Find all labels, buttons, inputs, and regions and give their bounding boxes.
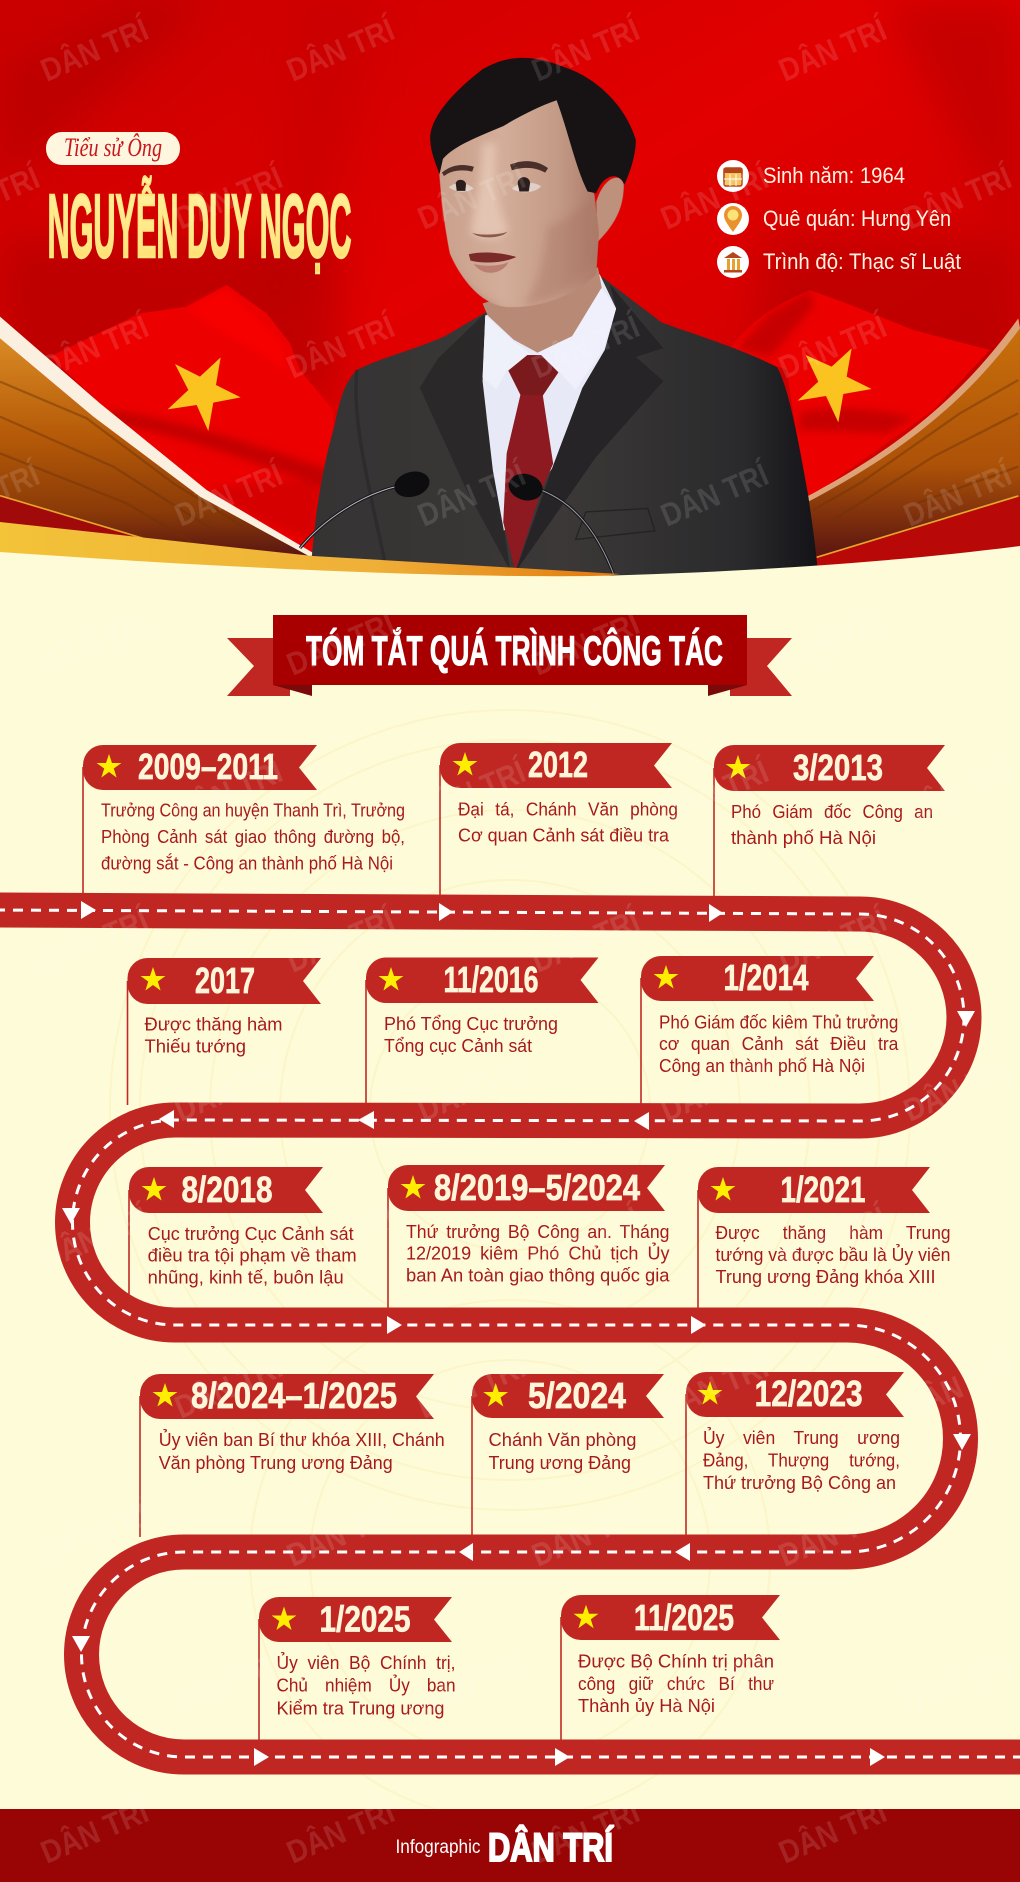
milestone: 3/2013: thành phố Hà Nội: [731, 828, 876, 848]
info row: education: Trình độ: Thạc sĩ Luật: [763, 249, 961, 274]
milestone: 11/2016: Phó Tổng Cục trưởng: [384, 1014, 558, 1034]
left flag star: [168, 357, 241, 431]
milestone: 11/2016: [366, 958, 598, 1104]
irises: [456, 177, 530, 192]
milestone: 11/2025: Thành ủy Hà Nội: [578, 1696, 715, 1716]
repeating watermarks: DÂN TRÍ: [526, 11, 645, 88]
milestone: 1/2021: Trung ương Đảng khóa XIII: [716, 1267, 936, 1287]
milestone: 2017: Thiếu tướng: [144, 1036, 246, 1056]
repeating watermarks: DÂN TRÍ: [35, 11, 154, 88]
milestone: 1/2025: Kiểm tra Trung ương: [276, 1698, 444, 1718]
biography pill label: Tiểu sử Ông: [64, 133, 162, 162]
repeating watermarks: DÂN TRÍ: [281, 11, 400, 88]
repeating watermarks: DÂN TRÍ: [655, 1051, 774, 1128]
repeating watermarks: DÂN TRÍ: [526, 605, 645, 682]
milestone: 8/2019–5/2024: Thứ trưởng Bộ Công an. Tháng: [406, 1222, 670, 1242]
faint drum pattern background: [110, 710, 910, 1820]
repeating watermarks: DÂN TRÍ: [773, 11, 892, 88]
info row: hometown: Quê quán: Hưng Yên: [763, 206, 951, 231]
milestone: 11/2016: Tổng cục Cảnh sát: [384, 1036, 532, 1056]
repeating watermarks: DÂN TRÍ: [773, 1199, 892, 1276]
milestone: 2017: 2017: [195, 960, 255, 1001]
repeating watermarks: DÂN TRÍ: [773, 1496, 892, 1573]
hair: [430, 58, 636, 193]
milestone: 1/2021: 1/2021: [780, 1169, 866, 1210]
milestone: 12/2023: Ủy viên Trung ương: [703, 1427, 900, 1448]
milestone: 3/2013: [714, 745, 945, 897]
repeating watermarks: DÂN TRÍ: [526, 1496, 645, 1573]
milestone: 8/2024–1/2025: 8/2024–1/2025: [191, 1375, 397, 1416]
milestone: 12/2023: Thứ trưởng Bộ Công an: [703, 1473, 896, 1493]
milestone: 1/2014: cơ quan Cảnh sát Điều tra: [659, 1034, 899, 1054]
repeating watermarks: DÂN TRÍ: [655, 753, 774, 830]
milestone: 2017: [128, 958, 321, 1105]
milestone: 8/2018: 8/2018: [182, 1169, 272, 1210]
milestone: 1/2014: Công an thành phố Hà Nội: [659, 1056, 865, 1076]
milestone: 2012: Đại tá, Chánh Văn phòng: [458, 800, 678, 820]
cream curve closing header: [0, 546, 1020, 612]
milestone: 8/2019–5/2024: 12/2019 kiêm Phó Chủ tịch Ủy: [406, 1242, 670, 1264]
milestone: 3/2013: 3/2013: [793, 747, 883, 788]
mouth: [469, 253, 516, 263]
left microphone: [300, 468, 432, 548]
left flag: [50, 285, 333, 553]
milestone: 1/2021: Được thăng hàm Trung: [716, 1223, 950, 1243]
repeating watermarks: DÂN TRÍ: [169, 1348, 288, 1425]
right flag: [730, 290, 990, 500]
milestone: 2009–2011: đường sắt - Công an thành phố Hà Nội: [101, 852, 393, 874]
repeating watermarks: DÂN TRÍ: [773, 902, 892, 979]
milestone: 11/2025: công giữ chức Bí thư: [578, 1674, 774, 1694]
portrait of Nguyễn Duy Ngọc: [300, 58, 818, 577]
footer bar: [0, 1809, 1020, 1882]
repeating watermarks: DÂN TRÍ: [281, 1793, 400, 1870]
milestone: 11/2025: [561, 1595, 780, 1742]
gold curved band: [0, 522, 620, 578]
footer logo: DÂN TRÍ: [488, 1824, 614, 1870]
info row: birth year: Sinh năm: 1964: [763, 163, 905, 188]
repeating watermarks: DÂN TRÍ: [412, 456, 531, 533]
milestone: 2017: Được thăng hàm: [144, 1014, 282, 1034]
repeating watermarks: DÂN TRÍ: [169, 1051, 288, 1128]
info row: hometown: [717, 203, 951, 235]
milestone: 2012: [440, 743, 678, 896]
repeating watermarks: DÂN TRÍ: [412, 753, 531, 830]
repeating watermarks: DÂN TRÍ: [412, 159, 531, 236]
right flag star: [798, 348, 872, 422]
icon: location pin: [724, 206, 742, 232]
milestone: 2012: Cơ quan Cảnh sát điều tra: [458, 826, 670, 846]
road centre dashes: [0, 910, 1020, 1757]
road direction arrows: [62, 901, 975, 1766]
info row: education: [717, 246, 961, 278]
repeating watermarks: DÂN TRÍ: [281, 1496, 400, 1573]
collar right wing: [538, 288, 616, 390]
milestone: 11/2025: Được Bộ Chính trị phân: [578, 1652, 774, 1672]
repeating watermarks: DÂN TRÍ: [35, 1199, 154, 1276]
repeating watermarks: DÂN TRÍ: [35, 1496, 154, 1573]
milestone: 1/2014: [641, 956, 899, 1105]
repeating watermarks: DÂN TRÍ: [169, 159, 288, 236]
milestone: 8/2019–5/2024: ban An toàn giao thông quốc gia: [406, 1266, 670, 1286]
milestone: 1/2025: 1/2025: [320, 1598, 410, 1640]
tie knot shading: [508, 355, 558, 395]
milestone: 11/2016: 11/2016: [444, 959, 538, 1000]
milestone: 2009–2011: Trưởng Công an huyện Thanh Trì, Trưởng: [101, 800, 405, 820]
milestone: 1/2025: Chủ nhiệm Ủy ban: [276, 1674, 456, 1696]
shirt and collar: [483, 274, 616, 531]
repeating watermarks: DÂN TRÍ: [281, 1199, 400, 1276]
repeating watermarks: DÂN TRÍ: [526, 308, 645, 385]
right ear: [596, 178, 624, 241]
header red background: [0, 0, 1020, 600]
repeating watermarks: DÂN TRÍ: [281, 902, 400, 979]
repeating watermarks: DÂN TRÍ: [655, 1348, 774, 1425]
footer bar: Infographic: [396, 1837, 480, 1858]
lower lip: [474, 262, 508, 273]
repeating watermarks: DÂN TRÍ: [526, 1793, 645, 1870]
repeating watermarks: DÂN TRÍ: [169, 456, 288, 533]
milestone: 5/2024: Trung ương Đảng: [488, 1453, 631, 1473]
icon: institution building: [724, 252, 742, 272]
repeating watermarks: DÂN TRÍ: [35, 1793, 154, 1870]
repeating watermarks: DÂN TRÍ: [35, 605, 154, 682]
eyebrows: [442, 161, 548, 176]
milestone: 1/2025: [259, 1597, 456, 1742]
suit jacket: [310, 278, 818, 577]
neck: [483, 267, 602, 353]
right microphone: [506, 470, 613, 574]
milestone: 1/2021: [698, 1167, 950, 1309]
repeating watermarks: DÂN TRÍ: [281, 308, 400, 385]
milestone: 8/2018: Cục trưởng Cục Cảnh sát: [148, 1224, 354, 1244]
milestone: 2009–2011: Phòng Cảnh sát giao thông đường bộ,: [101, 827, 405, 847]
repeating watermarks: DÂN TRÍ: [412, 1645, 531, 1722]
milestone: 8/2018: [129, 1167, 357, 1310]
repeating watermarks: DÂN TRÍ: [655, 1645, 774, 1722]
milestone: 8/2019–5/2024: 8/2019–5/2024: [434, 1167, 640, 1208]
milestone: 8/2019–5/2024: [388, 1165, 670, 1309]
milestone: 12/2023: Đảng, Thượng tướng,: [703, 1450, 900, 1470]
milestone: 2009–2011: [83, 745, 405, 895]
left golden roof wing: [0, 317, 315, 560]
collar left wing: [483, 316, 531, 390]
milestone: 1/2014: Phó Giám đốc kiêm Thủ trưởng: [659, 1012, 898, 1032]
milestone: 1/2014: 1/2014: [724, 957, 808, 998]
milestone: 8/2018: nhũng, kinh tế, buôn lậu: [148, 1268, 344, 1288]
repeating watermarks: DÂN TRÍ: [773, 1793, 892, 1870]
repeating watermarks: DÂN TRÍ: [412, 1348, 531, 1425]
repeating watermarks: DÂN TRÍ: [35, 902, 154, 979]
repeating watermarks: DÂN TRÍ: [526, 1199, 645, 1276]
milestone: 8/2024–1/2025: Ủy viên ban Bí thư khóa XIII, Chánh: [159, 1429, 445, 1450]
necktie: [503, 355, 558, 572]
face shading: [467, 142, 588, 306]
repeating watermarks: DÂN TRÍ: [655, 456, 774, 533]
suit pocket: [576, 508, 655, 539]
milestone: 8/2024–1/2025: [140, 1374, 445, 1537]
icon: calendar: [724, 168, 742, 186]
milestone: 8/2024–1/2025: Văn phòng Trung ương Đảng: [159, 1453, 393, 1473]
milestone: 1/2021: tướng và được bầu là Ủy viên: [716, 1244, 950, 1265]
winding road: [0, 910, 1020, 1757]
milestone: 5/2024: Chánh Văn phòng: [488, 1430, 636, 1450]
repeating watermarks: DÂN TRÍ: [412, 1051, 531, 1128]
repeating watermarks: DÂN TRÍ: [169, 1645, 288, 1722]
right lapel: [515, 285, 663, 572]
milestone: 2012: 2012: [528, 744, 588, 785]
repeating watermarks: DÂN TRÍ: [281, 605, 400, 682]
right golden roof wing: [807, 318, 1020, 570]
milestone: 8/2018: điều tra tội phạm về tham: [148, 1246, 357, 1266]
milestone: 1/2025: Ủy viên Bộ Chính trị,: [276, 1652, 456, 1673]
infographic canvas: NGUYỄN DUY NGỌC: [48, 175, 352, 277]
milestone: 12/2023: 12/2023: [755, 1373, 863, 1414]
repeating watermarks: DÂN TRÍ: [773, 308, 892, 385]
repeating watermarks: DÂN TRÍ: [655, 159, 774, 236]
section heading ribbon: TÓM TẮT QUÁ TRÌNH CÔNG TÁC: [306, 626, 723, 674]
milestone: 12/2023: [686, 1372, 904, 1537]
left sleeve seam: [356, 370, 386, 567]
face: [438, 85, 599, 307]
nostrils: [472, 232, 508, 237]
repeating watermarks: DÂN TRÍ: [773, 605, 892, 682]
milestone: 11/2025: 11/2025: [634, 1597, 734, 1638]
left lapel: [420, 314, 510, 570]
milestone: 2009–2011: 2009–2011: [138, 746, 278, 787]
info row: birth year: [717, 160, 905, 192]
repeating watermarks: DÂN TRÍ: [35, 308, 154, 385]
repeating watermarks: DÂN TRÍ: [526, 902, 645, 979]
milestone: 3/2013: Phó Giám đốc Công an: [731, 802, 933, 822]
repeating watermarks: DÂN TRÍ: [169, 753, 288, 830]
milestone: 5/2024: 5/2024: [528, 1375, 626, 1416]
section heading ribbon: [227, 615, 792, 696]
milestone: 5/2024: [472, 1374, 664, 1537]
eyes: [449, 183, 541, 192]
